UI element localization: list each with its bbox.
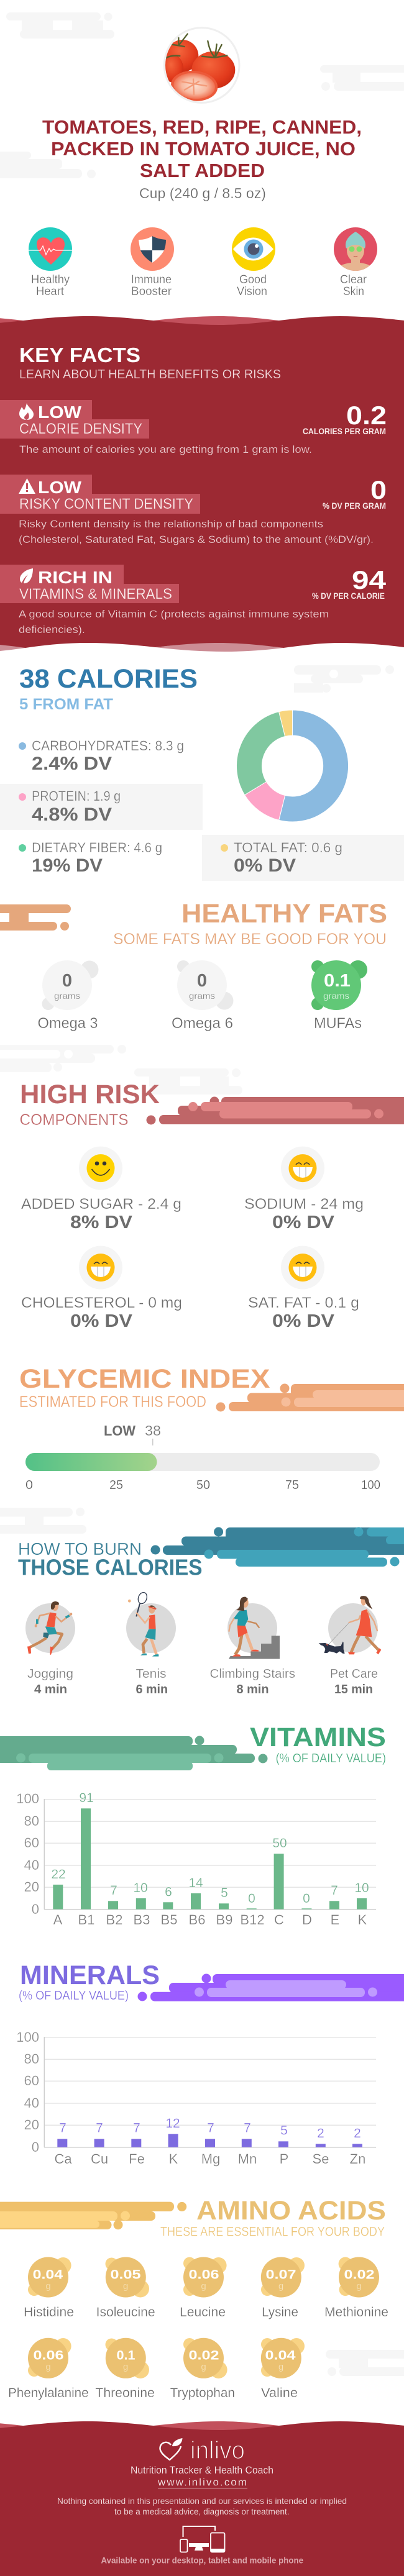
legend: protein (0, 784, 203, 830)
healthy fats heading: SOME FATS MAY BE GOOD FOR YOU (113, 931, 387, 948)
amino acids heading: AMINO ACIDS (196, 2196, 386, 2226)
bar chart: vitamins: 50 (272, 1836, 287, 1850)
glycemic index gauge: 38 (145, 1422, 161, 1439)
donut chart: macronutrients (236, 710, 349, 822)
activity labels: 15 min (334, 1683, 373, 1696)
healthy fats heading (113, 899, 387, 948)
bar chart: vitamins: 6 (165, 1885, 172, 1900)
benefit: immune booster: Immune (131, 273, 172, 286)
glycemic index gauge: LOW (104, 1422, 135, 1439)
bar chart: vitamins: 22 (51, 1867, 66, 1882)
risk: saturated fat (248, 1246, 359, 1331)
key fact: vitamins and minerals: A good source of Vitamin C (protects against immune system (19, 608, 329, 620)
bar chart: minerals: 7 (59, 2121, 67, 2136)
key fact: calorie density: 0.2 (346, 401, 387, 430)
benefit: clear skin (334, 227, 377, 298)
key fact: vitamins and minerals: % DV PER CALORIE (312, 591, 385, 601)
amino acid: histidine: 0.04 (33, 2267, 63, 2282)
benefit: healthy heart: Healthy (31, 273, 70, 286)
key fact: risky content density: (Cholesterol, Saturated Fat, Sugars & Sodium) to the amount (%DV/gr). (19, 534, 374, 545)
decorative cloud: calories (294, 665, 394, 693)
risk: sodium: 0% DV (272, 1213, 335, 1232)
key facts heading (19, 344, 281, 381)
vitamins heading (250, 1723, 386, 1765)
fat: omega 3: 0 (62, 971, 72, 991)
benefit: immune booster (131, 227, 174, 298)
amino acid: isoleucine: Isoleucine (96, 2305, 155, 2319)
amino acid: phenylalanine (8, 2338, 89, 2400)
key fact: vitamins and minerals: VITAMINS & MINERALS (19, 586, 172, 603)
key fact: calorie density (0, 400, 387, 455)
high risk heading: HIGH RISK (20, 1080, 160, 1109)
key facts heading: LEARN ABOUT HEALTH BENEFITS OR RISKS (19, 368, 281, 381)
key fact: calorie density: LOW (38, 403, 82, 422)
bar chart: vitamins: 91 (79, 1791, 94, 1805)
tagline: Nutrition Tracker & Health Coach (131, 2464, 273, 2476)
vitamins heading: VITAMINS (250, 1723, 386, 1752)
legend: carbohydrates: CARBOHYDRATES: 8.3 g (32, 738, 184, 753)
decorative clouds: high risk (0, 1045, 242, 1095)
glycemic index gauge: 50 (196, 1478, 210, 1492)
bar chart: vitamins: 80 (24, 1813, 39, 1829)
amino acid: threonine: Threonine (95, 2386, 155, 2400)
fat: omega 6: 0 (197, 971, 207, 991)
amino acid: histidine: g (45, 2281, 51, 2292)
amino acid: methionine: Methionine (324, 2305, 388, 2319)
website: www.inlivo.com (157, 2476, 247, 2488)
healthy fats banner graphic (0, 904, 71, 931)
icon: devices (180, 2526, 225, 2552)
key fact: vitamins and minerals: RICH IN (38, 568, 112, 587)
risk: added sugar: 8% DV (70, 1213, 133, 1232)
bar chart: vitamins: B3 (134, 1912, 150, 1927)
fat: omega 3: grams (54, 991, 80, 1001)
bar chart: minerals: Ca (54, 2151, 72, 2167)
amino acid: valine (261, 2338, 305, 2400)
title: TOMATOES, RED, RIPE, CANNED, (42, 116, 362, 138)
bar chart: vitamins: 0 (303, 1891, 310, 1906)
legend: dietary fiber (19, 840, 162, 876)
logo: inlivo (160, 2437, 245, 2464)
amino acids banner graphic (0, 2202, 186, 2229)
decorative cloud: amino acids (326, 2350, 404, 2376)
burn calories banner graphic (150, 1527, 404, 1567)
amino acid: threonine: 0.1 (117, 2348, 135, 2362)
minerals heading (19, 1960, 160, 2003)
bar chart: minerals: 7 (133, 2121, 140, 2136)
bar chart: vitamins: E (331, 1912, 339, 1927)
bar chart: vitamins: 7 (331, 1883, 338, 1898)
fat: omega 6 (172, 960, 234, 1032)
amino acid: lysine: Lysine (262, 2305, 298, 2319)
legend: total fat (202, 835, 404, 881)
bar chart: vitamins: 7 (110, 1883, 117, 1898)
bar chart: vitamins: C (274, 1912, 284, 1927)
bar chart: vitamins: 5 (221, 1886, 228, 1900)
risk: cholesterol (21, 1246, 182, 1331)
decorative top clouds (0, 12, 404, 178)
amino acid: isoleucine (96, 2257, 155, 2319)
amino acid: leucine: Leucine (180, 2305, 226, 2319)
legend: carbohydrates (19, 738, 184, 774)
key fact: risky content density: RISKY CONTENT DENSITY (19, 496, 193, 512)
key fact: risky content density (0, 475, 387, 545)
activity labels: 8 min (236, 1683, 269, 1696)
activity: pet care (319, 1596, 381, 1654)
minerals heading: (% OF DAILY VALUE) (19, 1989, 129, 2003)
calories heading: 5 FROM FAT (19, 696, 113, 713)
bar chart: vitamins: B2 (106, 1912, 122, 1927)
serving size: Cup (240 g / 8.5 oz) (139, 185, 266, 201)
bar chart: minerals: 40 (24, 2095, 39, 2111)
activity: climbing stairs (227, 1597, 280, 1659)
amino acid: isoleucine: 0.05 (111, 2267, 141, 2282)
bar chart: vitamins: 10 (133, 1881, 148, 1895)
legend: protein: 4.8% DV (32, 804, 112, 825)
benefit: healthy heart: Heart (36, 285, 65, 298)
bar chart: minerals: 20 (24, 2117, 39, 2132)
bar chart: vitamins: 14 (188, 1876, 203, 1890)
amino acid: leucine: g (201, 2281, 206, 2292)
bar chart: minerals: 0 (32, 2139, 39, 2155)
bar chart: minerals: Se (313, 2151, 329, 2167)
amino acid: threonine: g (123, 2362, 128, 2372)
bar chart: vitamins: 0 (32, 1901, 39, 1917)
bar chart: vitamins: 100 (16, 1791, 39, 1806)
bar chart: minerals: 2 (354, 2126, 361, 2141)
key fact: risky content density: 0 (370, 475, 387, 504)
bar chart: minerals: 7 (96, 2121, 103, 2136)
healthy fats heading: HEALTHY FATS (181, 899, 387, 929)
disclaimer (57, 2496, 347, 2516)
amino acid: lysine: 0.07 (266, 2267, 296, 2282)
activity labels: 4 min (34, 1683, 67, 1696)
amino acid: methionine (324, 2257, 388, 2319)
hero image: tomatoes (163, 28, 239, 103)
bar chart: minerals: 7 (207, 2121, 214, 2136)
amino acid: leucine (180, 2257, 227, 2319)
bar chart: minerals: 5 (280, 2124, 288, 2138)
vitamins heading: (% OF DAILY VALUE) (276, 1752, 386, 1765)
bar chart: minerals: P (280, 2151, 288, 2167)
high risk banner graphic (147, 1097, 404, 1124)
bar chart: vitamins: 20 (24, 1879, 39, 1895)
amino acid: threonine (95, 2338, 155, 2400)
fat: omega 3: Omega 3 (37, 1015, 98, 1032)
amino acid: leucine: 0.06 (189, 2267, 219, 2282)
benefit: good vision: Vision (237, 285, 267, 298)
title: PACKED IN TOMATO JUICE, NO (51, 138, 356, 160)
high risk heading (20, 1080, 160, 1129)
bar chart: minerals: 60 (24, 2073, 39, 2088)
key fact: risky content density: Risky Content density is the relationship of bad components (19, 518, 323, 530)
amino acids heading (160, 2196, 386, 2239)
calories heading (19, 664, 198, 713)
vitamins banner graphic (0, 1736, 267, 1770)
glycemic index gauge: 25 (109, 1478, 123, 1492)
legend: total fat: TOTAL FAT: 0.6 g (234, 840, 342, 855)
risk: sodium: SODIUM - 24 mg (244, 1196, 364, 1213)
risk: added sugar (21, 1147, 181, 1232)
title (42, 116, 362, 181)
amino acid: tryptophan: g (201, 2362, 206, 2372)
amino acid: tryptophan: Tryptophan (170, 2386, 235, 2400)
bar chart: vitamins: A (53, 1912, 63, 1927)
bar chart: minerals: Mg (201, 2151, 220, 2167)
risk: saturated fat: 0% DV (272, 1311, 335, 1331)
decorative cloud: burn (0, 1508, 86, 1534)
disclaimer: to be a medical advice, diagnosis or treatment. (114, 2506, 290, 2516)
bar chart: minerals: K (169, 2151, 178, 2167)
amino acid: phenylalanine: 0.06 (34, 2348, 63, 2362)
bar chart: minerals: Cu (91, 2151, 108, 2167)
bar chart: vitamins (16, 1791, 376, 1927)
bar chart: minerals: 100 (16, 2029, 39, 2045)
bar chart: vitamins: D (302, 1912, 312, 1927)
bar chart: minerals: Zn (350, 2151, 365, 2167)
bar chart: minerals: 2 (317, 2126, 324, 2141)
bar chart: vitamins: B1 (78, 1912, 94, 1927)
burn calories heading: HOW TO BURN (18, 1539, 142, 1559)
glycemic index gauge: 75 (285, 1478, 299, 1492)
disclaimer: Nothing contained in this presentation and our services is intended or implied (57, 2496, 347, 2506)
benefit: clear skin: Skin (343, 285, 364, 298)
bar chart: minerals (16, 2029, 376, 2167)
key fact: calorie density: CALORIE DENSITY (19, 421, 142, 437)
key fact: vitamins and minerals (0, 565, 387, 635)
minerals banner graphic (138, 1974, 404, 2001)
benefit: good vision (232, 227, 275, 298)
fat: MUFAs: MUFAs (314, 1015, 362, 1032)
legend: carbohydrates: 2.4% DV (32, 753, 112, 774)
activity: tennis (126, 1591, 176, 1657)
bar chart: vitamins: 40 (24, 1857, 39, 1873)
fat: MUFAs: grams (323, 991, 349, 1001)
bar chart: vitamins: 10 (354, 1881, 369, 1895)
bar chart: vitamins: B12 (240, 1912, 265, 1927)
amino acid: histidine (24, 2257, 74, 2319)
logo: inlivo: inlivo (190, 2437, 245, 2464)
amino acid: methionine: 0.02 (344, 2267, 374, 2282)
glycemic index gauge (25, 1422, 380, 1492)
bar chart: vitamins: K (358, 1912, 367, 1927)
activity labels (27, 1667, 378, 1696)
key fact: calorie density: CALORIES PER GRAM (303, 426, 386, 436)
panel: key facts (0, 316, 404, 652)
amino acid: tryptophan (170, 2338, 235, 2400)
legend: protein: PROTEIN: 1.9 g (32, 788, 121, 804)
fat: omega 3 (37, 960, 98, 1032)
bar chart: vitamins: B5 (161, 1912, 177, 1927)
burn calories heading (18, 1539, 203, 1580)
glycemic index heading: ESTIMATED FOR THIS FOOD (19, 1393, 206, 1411)
key facts heading: KEY FACTS (19, 344, 140, 366)
activity labels: Pet Care (330, 1667, 378, 1681)
amino acid: lysine: g (278, 2281, 283, 2292)
risk: sodium (244, 1147, 364, 1232)
amino acid: lysine (261, 2257, 305, 2319)
amino acid: isoleucine: g (123, 2281, 128, 2292)
glycemic index banner graphic (216, 1384, 404, 1411)
risk: cholesterol: 0% DV (70, 1311, 133, 1331)
availability note: Available on your desktop, tablet and mobile phone (101, 2556, 303, 2565)
activity labels: Climbing Stairs (210, 1667, 295, 1681)
risk: added sugar: ADDED SUGAR - 2.4 g (21, 1196, 181, 1213)
activity labels: 6 min (135, 1683, 168, 1696)
key fact: vitamins and minerals: 94 (352, 565, 387, 594)
bar chart: minerals: 7 (244, 2121, 251, 2136)
amino acid: valine: 0.04 (265, 2348, 296, 2362)
amino acid: phenylalanine: Phenylalanine (8, 2386, 89, 2400)
fat: MUFAs (311, 960, 367, 1032)
activity labels: Jogging (27, 1667, 73, 1681)
fat: MUFAs: 0.1 (324, 971, 351, 991)
activity labels: Tenis (135, 1667, 167, 1681)
bar chart: vitamins: B6 (189, 1912, 205, 1927)
amino acid: valine: g (278, 2362, 283, 2372)
burn calories heading: THOSE CALORIES (18, 1554, 203, 1580)
glycemic index heading (19, 1364, 270, 1411)
high risk heading: COMPONENTS (20, 1111, 128, 1129)
minerals heading: MINERALS (20, 1960, 160, 1990)
amino acid: tryptophan: 0.02 (189, 2348, 219, 2362)
risk: saturated fat: SAT. FAT - 0.1 g (248, 1295, 359, 1311)
key fact: risky content density: % DV PER GRAM (323, 501, 386, 511)
benefit: good vision: Good (239, 273, 267, 286)
glycemic index gauge: 0 (25, 1478, 33, 1492)
bar chart: minerals: 12 (165, 2116, 180, 2131)
amino acid: valine: Valine (261, 2386, 298, 2400)
bar chart: vitamins: 0 (248, 1891, 255, 1906)
risk: cholesterol: CHOLESTEROL - 0 mg (21, 1295, 182, 1311)
glycemic index heading: GLYCEMIC INDEX (19, 1364, 270, 1394)
legend: dietary fiber: 19% DV (32, 855, 103, 876)
panel: footer (0, 2421, 404, 2576)
calories heading: 38 CALORIES (19, 664, 198, 694)
fat: omega 6: grams (189, 991, 215, 1001)
legend: total fat: 0% DV (234, 855, 296, 876)
bar chart: minerals: 80 (24, 2051, 39, 2067)
bar chart: vitamins: B9 (216, 1912, 232, 1927)
bar chart: minerals: Mn (238, 2151, 257, 2167)
amino acid: phenylalanine: g (45, 2362, 51, 2372)
bar chart: minerals: Fe (129, 2151, 145, 2167)
amino acid: histidine: Histidine (24, 2305, 74, 2319)
glycemic index gauge: 100 (361, 1478, 380, 1492)
benefit: healthy heart (29, 227, 72, 298)
key fact: risky content density: LOW (38, 478, 82, 497)
key fact: calorie density: The amount of calories you are getting from 1 gram is low. (19, 444, 312, 455)
bar chart: vitamins: 60 (24, 1835, 39, 1850)
legend: dietary fiber: DIETARY FIBER: 4.6 g (32, 840, 162, 855)
benefit: immune booster: Booster (131, 285, 172, 298)
benefit: clear skin: Clear (340, 273, 367, 286)
title: SALT ADDED (140, 160, 265, 181)
key fact: vitamins and minerals: deficiencies). (19, 624, 85, 635)
fat: omega 6: Omega 6 (172, 1015, 233, 1032)
activity: jogging (25, 1601, 75, 1655)
amino acid: methionine: g (356, 2281, 362, 2292)
